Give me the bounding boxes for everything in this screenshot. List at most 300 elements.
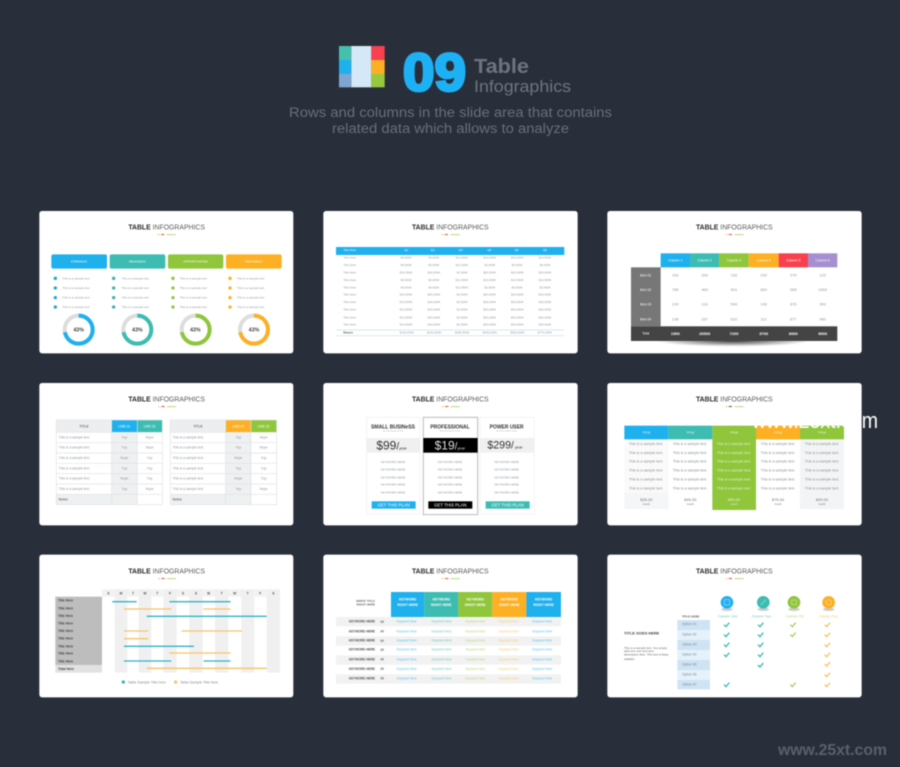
table rows: $2,500K — [457, 293, 468, 297]
keyword cells: Keyword Here — [432, 647, 452, 651]
row labels — [631, 267, 661, 326]
gantt bars blue — [112, 602, 267, 661]
table rows: $20,000K — [511, 293, 524, 297]
left table: This is a sample text. — [59, 477, 90, 481]
right table: Nope — [260, 446, 268, 450]
right table: Yup — [235, 446, 241, 450]
bullet text: This is a sample text — [122, 305, 149, 309]
option rows — [677, 620, 710, 689]
table rows: $13,500K — [400, 300, 412, 304]
table rows: $2,500K — [457, 323, 468, 327]
table rows text: This is a sample text. — [805, 451, 839, 455]
table headers: TITLE — [818, 431, 826, 435]
row values: 100 — [672, 272, 679, 277]
total row: $400,000K — [483, 331, 497, 335]
legend — [122, 680, 218, 684]
bullet text: This is a sample text — [237, 276, 264, 280]
table rows: $11,500K — [456, 278, 468, 282]
day headers: F — [259, 591, 261, 595]
bullet text: This is a sample text — [237, 296, 264, 300]
plan: professional: PROFESSIONAL — [430, 424, 470, 430]
table rows: $13,500K — [400, 270, 412, 274]
legend: Table Sample Title here — [180, 680, 218, 684]
bullet text: This is a sample text — [237, 286, 264, 290]
prices: $99.00 — [816, 497, 829, 502]
column labels: Column Thr — [786, 614, 805, 618]
table rows: $20,000K — [483, 323, 496, 327]
row labels: ## — [380, 648, 384, 652]
side description: description here. This text is Easy — [624, 652, 669, 656]
right table: Yup — [235, 435, 241, 439]
table rows: $4,000K — [428, 278, 439, 282]
bullet text: This is a sample text — [122, 276, 149, 280]
table rows: $20,000K — [539, 315, 551, 319]
table rows text: This is a sample text. — [805, 460, 839, 464]
plan: professional: GET THIS PLAN — [434, 503, 466, 508]
row labels: Title Here — [58, 606, 73, 610]
prices: /month — [643, 503, 651, 506]
right table: This is a sample text. — [173, 446, 204, 450]
row values — [672, 272, 828, 321]
keyword cells — [397, 620, 553, 681]
table headers: TITLE — [774, 431, 782, 435]
row values: 541 — [731, 287, 738, 292]
table rows: $13,000K — [483, 278, 496, 282]
keyword cells: Keyword Here — [532, 647, 553, 651]
day headers: S — [182, 591, 185, 595]
total row: 9000 — [818, 331, 828, 336]
icon: column badges — [721, 596, 835, 611]
keyword cells: Keyword Here — [532, 629, 553, 633]
table rows: $13,500K — [511, 256, 524, 260]
prices — [640, 497, 829, 506]
row values: 540 — [731, 302, 738, 307]
subtitle: related data which allows to analyze — [332, 121, 569, 136]
table rows: Title Here — [343, 315, 356, 319]
table backgrounds — [624, 426, 844, 510]
donut values: 43% — [132, 328, 143, 334]
option rows: Option 05 — [682, 662, 697, 666]
table rows: $20,000K — [428, 270, 440, 274]
table rows text: This is a sample text. — [761, 469, 795, 473]
table rows text — [629, 442, 839, 490]
table rows: $20,000K — [511, 308, 524, 312]
panel title: TABLE INFOGRAPHICS — [412, 223, 489, 232]
table rows text: This is a sample text. — [673, 477, 707, 481]
keyword cells: Keyword Here — [465, 658, 486, 662]
panel: feature checklist — [607, 555, 862, 697]
plan: power user — [480, 417, 534, 514]
option rows: Option 02 — [682, 632, 697, 636]
row title: RIGHT HERE — [357, 603, 375, 607]
table rows: Title Here — [343, 323, 356, 327]
table rows: $3,500K — [540, 263, 551, 267]
right table: Notes — [173, 497, 182, 501]
row labels: Title Here — [58, 614, 73, 618]
table rows text: This is a sample text. — [673, 486, 707, 490]
bullet text: This is a sample text — [122, 296, 149, 300]
plan: small business: KEYWORD HERE — [381, 490, 405, 494]
row values: 877 — [790, 316, 797, 321]
left table: Yup — [121, 466, 127, 470]
column headers — [51, 254, 282, 269]
table rows: $3,500K — [540, 285, 551, 289]
table rows: $11,500K — [456, 285, 468, 289]
total row: 3700 — [759, 331, 769, 336]
table rows: $20,000K — [483, 308, 496, 312]
title accent — [158, 405, 176, 408]
left table: Nope — [146, 487, 154, 491]
table rows: $13,500K — [539, 256, 551, 260]
table rows: $13,500K — [400, 293, 412, 297]
plan: power user: KEYWORD HERE — [494, 483, 519, 487]
right table: This is a sample text. — [173, 435, 204, 439]
row values: 167 — [701, 316, 709, 321]
title accent — [725, 405, 744, 408]
check marks — [724, 623, 830, 687]
row values: 870 — [790, 302, 797, 307]
row values: 390 — [819, 302, 827, 307]
plan: power user: $299/ year — [487, 440, 523, 452]
total row — [631, 326, 837, 341]
prices: /month — [818, 503, 826, 506]
day headers: F — [169, 591, 171, 595]
keyword cells: Keyword Here — [499, 647, 519, 651]
keyword cells: Keyword Here — [499, 677, 519, 681]
table rows text: This is a sample text. — [673, 469, 707, 473]
table rows: $20,000K — [511, 323, 524, 327]
plan: power user: KEYWORD HERE — [494, 468, 519, 472]
row values: 130 — [760, 302, 768, 307]
table headers — [624, 426, 844, 439]
table rows: Title Here — [343, 308, 356, 312]
table header: Q6 — [543, 248, 547, 252]
donut charts — [65, 316, 268, 344]
prices: /month — [687, 503, 695, 506]
day headers: W — [143, 591, 147, 595]
keyword cells: Keyword Here — [432, 667, 452, 671]
panel: highlighted column table — [607, 383, 862, 525]
table rows text: This is a sample text. — [805, 486, 839, 490]
gantt bars orange — [124, 609, 267, 668]
keyword cells: Keyword Here — [397, 629, 417, 633]
row labels: ## — [380, 677, 384, 681]
table rows: $3,000K — [484, 285, 495, 289]
plan: small business: KEYWORD HERE — [381, 460, 405, 464]
day headers: S — [272, 591, 275, 595]
column headers: RIGHT HERE — [431, 603, 452, 607]
table rows: $20,000K — [483, 300, 496, 304]
keyword cells: Keyword Here — [532, 658, 553, 662]
bullet text: This is a sample text — [237, 305, 264, 309]
left table: Yup — [147, 456, 153, 460]
shadow under totals — [657, 335, 810, 347]
plan: professional — [423, 417, 478, 515]
day headers: T — [156, 591, 158, 595]
day headers: M — [120, 591, 123, 595]
table rows: $20,000K — [539, 300, 551, 304]
table rows: Title Here — [343, 263, 356, 267]
table rows text: This is a sample text. — [673, 460, 707, 464]
left table: Yup — [121, 446, 127, 450]
prices: $45.00 — [684, 497, 697, 502]
donut values: 43% — [190, 328, 201, 334]
table rows text: This is a sample text. — [629, 442, 663, 446]
table headers: TITLE — [730, 431, 738, 435]
left table: This is a sample text. — [59, 487, 90, 491]
table rows: $20,000K — [539, 293, 551, 297]
row title: WRITE TITLE — [356, 599, 375, 603]
plan: professional: KEYWORD HERE — [438, 490, 462, 494]
left table: LINE 02 — [144, 424, 156, 428]
row labels: ## — [380, 667, 384, 671]
keyword cells: Keyword Here — [499, 620, 519, 624]
keyword cells: Keyword Here — [397, 639, 417, 643]
row labels: KEYWORD HERE — [349, 658, 375, 662]
keyword cells: Keyword Here — [532, 639, 553, 643]
panel title: TABLE INFOGRAPHICS — [128, 394, 205, 403]
table rows text: This is a sample text. — [717, 451, 751, 455]
left table — [56, 420, 162, 505]
column headers: WEAKNESS — [129, 259, 146, 263]
day headers: T — [247, 591, 249, 595]
total row: $120,000K — [427, 331, 441, 335]
big number: 09 — [403, 44, 466, 102]
keyword cells: Keyword Here — [432, 629, 452, 633]
row values: 220 — [672, 302, 679, 307]
panel: financial table — [323, 211, 578, 353]
row labels: Title Here — [58, 637, 73, 641]
row labels: Title Here — [58, 659, 73, 663]
option rows: Option 04 — [682, 652, 697, 656]
table header: Q5 — [515, 248, 519, 252]
row labels: KEYWORD HERE — [349, 667, 375, 671]
total row: $180,500K — [455, 331, 469, 335]
day headers: T — [221, 591, 223, 595]
panel title: TABLE INFOGRAPHICS — [128, 223, 205, 232]
table rows text: This is a sample text. — [673, 451, 707, 455]
plan: small business: $99/year — [376, 439, 408, 453]
table header: Q2 — [431, 248, 435, 252]
table rows text: This is a sample text. — [717, 460, 751, 464]
column headers: STRENGHT — [71, 259, 87, 263]
table rows: Title Here — [343, 278, 356, 282]
column headers: Column 5 — [786, 259, 801, 263]
row labels — [349, 620, 384, 681]
table rows: $11,500K — [456, 263, 468, 267]
table rows text: This is a sample text. — [805, 477, 839, 481]
table rows text: This is a sample text. — [717, 477, 751, 481]
column headers: KEYWORD — [433, 597, 451, 601]
table rows: $20,000K — [428, 308, 440, 312]
donut values: 43% — [73, 328, 84, 334]
total row: 7200 — [730, 331, 739, 336]
table rows: $13,500K — [400, 323, 412, 327]
grid bands — [102, 589, 280, 673]
total row: Return — [343, 331, 353, 335]
left table: Yup — [121, 435, 127, 439]
table rows text: This is a sample text. — [761, 442, 795, 446]
panel: two comparison tables — [39, 383, 293, 525]
row labels: ## — [380, 620, 384, 624]
panel title: TABLE INFOGRAPHICS — [696, 394, 773, 403]
column headers: RIGHT HERE — [397, 603, 419, 607]
table headers: TITLE — [642, 431, 650, 435]
side description: add your own text and — [624, 649, 654, 653]
keyword cells: Keyword Here — [499, 667, 519, 671]
prices: $55.00 — [728, 497, 741, 502]
table rows: $20,000K — [428, 293, 440, 297]
table headers: TITLE — [686, 431, 694, 435]
column headers: KEYWORD — [501, 597, 519, 601]
column headers: TREATMENT — [245, 259, 263, 263]
table rows text: This is a sample text. — [673, 442, 707, 446]
left table: TITLE — [79, 424, 89, 428]
bullet text: This is a sample text — [180, 305, 207, 309]
panel title: TABLE INFOGRAPHICS — [696, 223, 773, 232]
side title: TITLE GOES HERE — [624, 630, 660, 635]
table rows text: This is a sample text. — [805, 442, 839, 446]
side description: This is a sample text. You simply — [624, 646, 668, 650]
column headers: RIGHT HERE — [533, 603, 555, 607]
keyword cells: Keyword Here — [532, 667, 553, 671]
left table: Yup — [147, 477, 153, 481]
keyword cells: Keyword Here — [499, 629, 519, 633]
heading: Table: Table — [474, 56, 529, 78]
plan: power user: POWER USER — [490, 424, 524, 430]
plan: small business — [367, 417, 420, 514]
table rows: $20,000K — [539, 323, 551, 327]
plan: professional: $19/year — [435, 439, 466, 453]
day headers: M — [207, 591, 210, 595]
day headers: S — [195, 591, 198, 595]
table rows: $11,500K — [456, 256, 468, 260]
right table: LINE 01 — [232, 424, 244, 428]
right table: Yup — [235, 466, 241, 470]
row labels: Title Here — [58, 644, 73, 648]
side description: editable. — [624, 657, 635, 661]
left table: Nope — [146, 435, 154, 439]
panel title: TABLE INFOGRAPHICS — [412, 566, 489, 575]
panel title: TABLE INFOGRAPHICS — [412, 394, 489, 403]
table rows: $20,000K — [539, 270, 551, 274]
bullet text: This is a sample text — [180, 296, 207, 300]
table rows text: This is a sample text. — [761, 460, 795, 464]
row labels: KEYWORD HERE — [349, 629, 375, 633]
right table: This is a sample text. — [173, 466, 204, 470]
table rows: $20,000K — [428, 323, 440, 327]
column headers: OPPORTUNITIES — [183, 259, 208, 263]
right table: This is a sample text. — [173, 456, 204, 460]
title accent — [442, 405, 460, 408]
keyword cells: Keyword Here — [432, 639, 452, 643]
keyword cells: Keyword Here — [465, 620, 486, 624]
plan: small business: KEYWORD HERE — [381, 468, 405, 472]
left table: Nope — [120, 477, 128, 481]
title accent — [725, 233, 744, 236]
row labels: Item 01 — [640, 273, 651, 277]
table rows text: This is a sample text. — [717, 469, 751, 473]
row labels: Total Here — [58, 667, 74, 671]
keyword cells: Keyword Here — [432, 658, 452, 662]
table rows text: This is a sample text. — [761, 477, 795, 481]
right table: Nope — [260, 435, 268, 439]
title accent — [725, 577, 744, 580]
watermark bottom right: www.25xt.com — [777, 742, 887, 759]
column headers — [661, 253, 837, 267]
panel: gantt table — [39, 555, 293, 697]
table rows text: This is a sample text. — [629, 451, 663, 455]
row values: 632 — [731, 316, 738, 321]
subtitle — [289, 105, 612, 136]
title accent — [157, 233, 176, 236]
row values: 150 — [731, 272, 738, 277]
table rows text: This is a sample text. — [761, 486, 795, 490]
option rows: Option 07 — [682, 682, 697, 686]
total row — [336, 330, 564, 336]
panel title: TABLE INFOGRAPHICS — [128, 566, 205, 575]
table rows: $6,500K — [401, 285, 412, 289]
row labels: KEYWORD HERE — [349, 639, 375, 643]
plan: power user: KEYWORD HERE — [494, 490, 519, 494]
title accent — [441, 233, 460, 236]
table rows: $13,500K — [400, 315, 412, 319]
column headers: Column 4 — [757, 259, 771, 263]
day headers: T — [132, 591, 134, 595]
column headers: Column 3 — [727, 259, 741, 263]
row labels: Title Here — [58, 599, 73, 603]
right table: TITLE — [193, 424, 203, 428]
table header — [336, 247, 564, 255]
plan: power user: short description of plan — [496, 429, 517, 432]
table rows: $2,500K — [457, 300, 468, 304]
right table: Nope — [234, 477, 242, 481]
column headers: Column 6 — [816, 259, 830, 263]
row labels: KEYWORD HERE — [349, 647, 375, 651]
header block — [289, 44, 612, 136]
plan: power user: KEYWORD HERE — [494, 460, 519, 464]
bullet text: This is a sample text — [62, 276, 90, 280]
bullet text: This is a sample text — [180, 286, 207, 290]
row labels: Title Here — [58, 652, 73, 656]
keyword cells: Keyword Here — [397, 620, 417, 624]
row values: 230 — [760, 272, 768, 277]
bullet text: This is a sample text — [62, 296, 90, 300]
row values: 1900 — [818, 287, 828, 292]
left table: Nope — [146, 446, 154, 450]
table rows: $3,000K — [484, 263, 495, 267]
table header: Q1 — [404, 248, 409, 252]
panel: column totals table — [607, 211, 862, 353]
table rows: $6,500K — [401, 263, 412, 267]
prices: /month — [730, 503, 738, 506]
row bands — [336, 617, 561, 684]
table rows: $4,000K — [428, 263, 439, 267]
table header: Q3 — [459, 248, 463, 252]
table rows: $20,000K — [483, 293, 496, 297]
right table — [170, 420, 277, 505]
total row: 20500 — [699, 331, 711, 336]
row labels: KEYWORD HERE — [349, 677, 375, 681]
left table: Nope — [120, 456, 128, 460]
bullet text: This is a sample text — [62, 305, 90, 309]
row values: 120 — [819, 272, 827, 277]
plan: small business: short description of plan — [382, 429, 404, 432]
keyword cells: Keyword Here — [432, 677, 452, 681]
right table: Yup — [261, 456, 267, 460]
table rows — [343, 256, 551, 327]
total row: 8000 — [789, 331, 799, 336]
